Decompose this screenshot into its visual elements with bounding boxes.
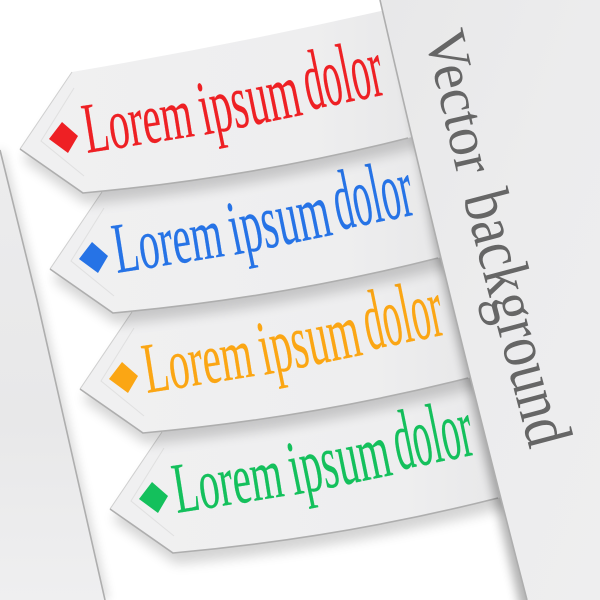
label: blue: dolor	[324, 141, 420, 249]
label: green	[167, 381, 480, 529]
label: blue	[107, 141, 420, 289]
label: blue: Lorem	[107, 193, 228, 289]
label: red	[77, 21, 390, 169]
panel: right sheet	[380, 0, 600, 600]
label: red: ipsum	[190, 46, 307, 152]
label: orange	[137, 261, 450, 409]
panel: left background sheet	[0, 150, 116, 600]
label: green: dolor	[384, 381, 480, 489]
icon: green diamond	[139, 482, 168, 513]
label: orange: ipsum	[250, 286, 367, 392]
label: red: Lorem	[77, 73, 198, 169]
tag: blue	[50, 131, 473, 324]
tag: red	[20, 11, 443, 204]
icon: blue diamond	[79, 242, 108, 273]
heading: vector background: Vector	[412, 24, 507, 180]
icon: orange diamond	[109, 362, 138, 393]
heading: vector background: background	[448, 182, 585, 454]
label: red: dolor	[294, 21, 390, 129]
label: orange: Lorem	[137, 313, 258, 409]
label: orange: dolor	[354, 261, 450, 369]
label: green: ipsum	[280, 406, 397, 512]
label: green: Lorem	[167, 433, 288, 529]
tag: green	[110, 371, 533, 564]
label: blue: ipsum	[220, 166, 337, 272]
tag: orange	[80, 251, 503, 444]
icon: red diamond	[49, 122, 78, 153]
heading: vector background	[428, 27, 574, 450]
